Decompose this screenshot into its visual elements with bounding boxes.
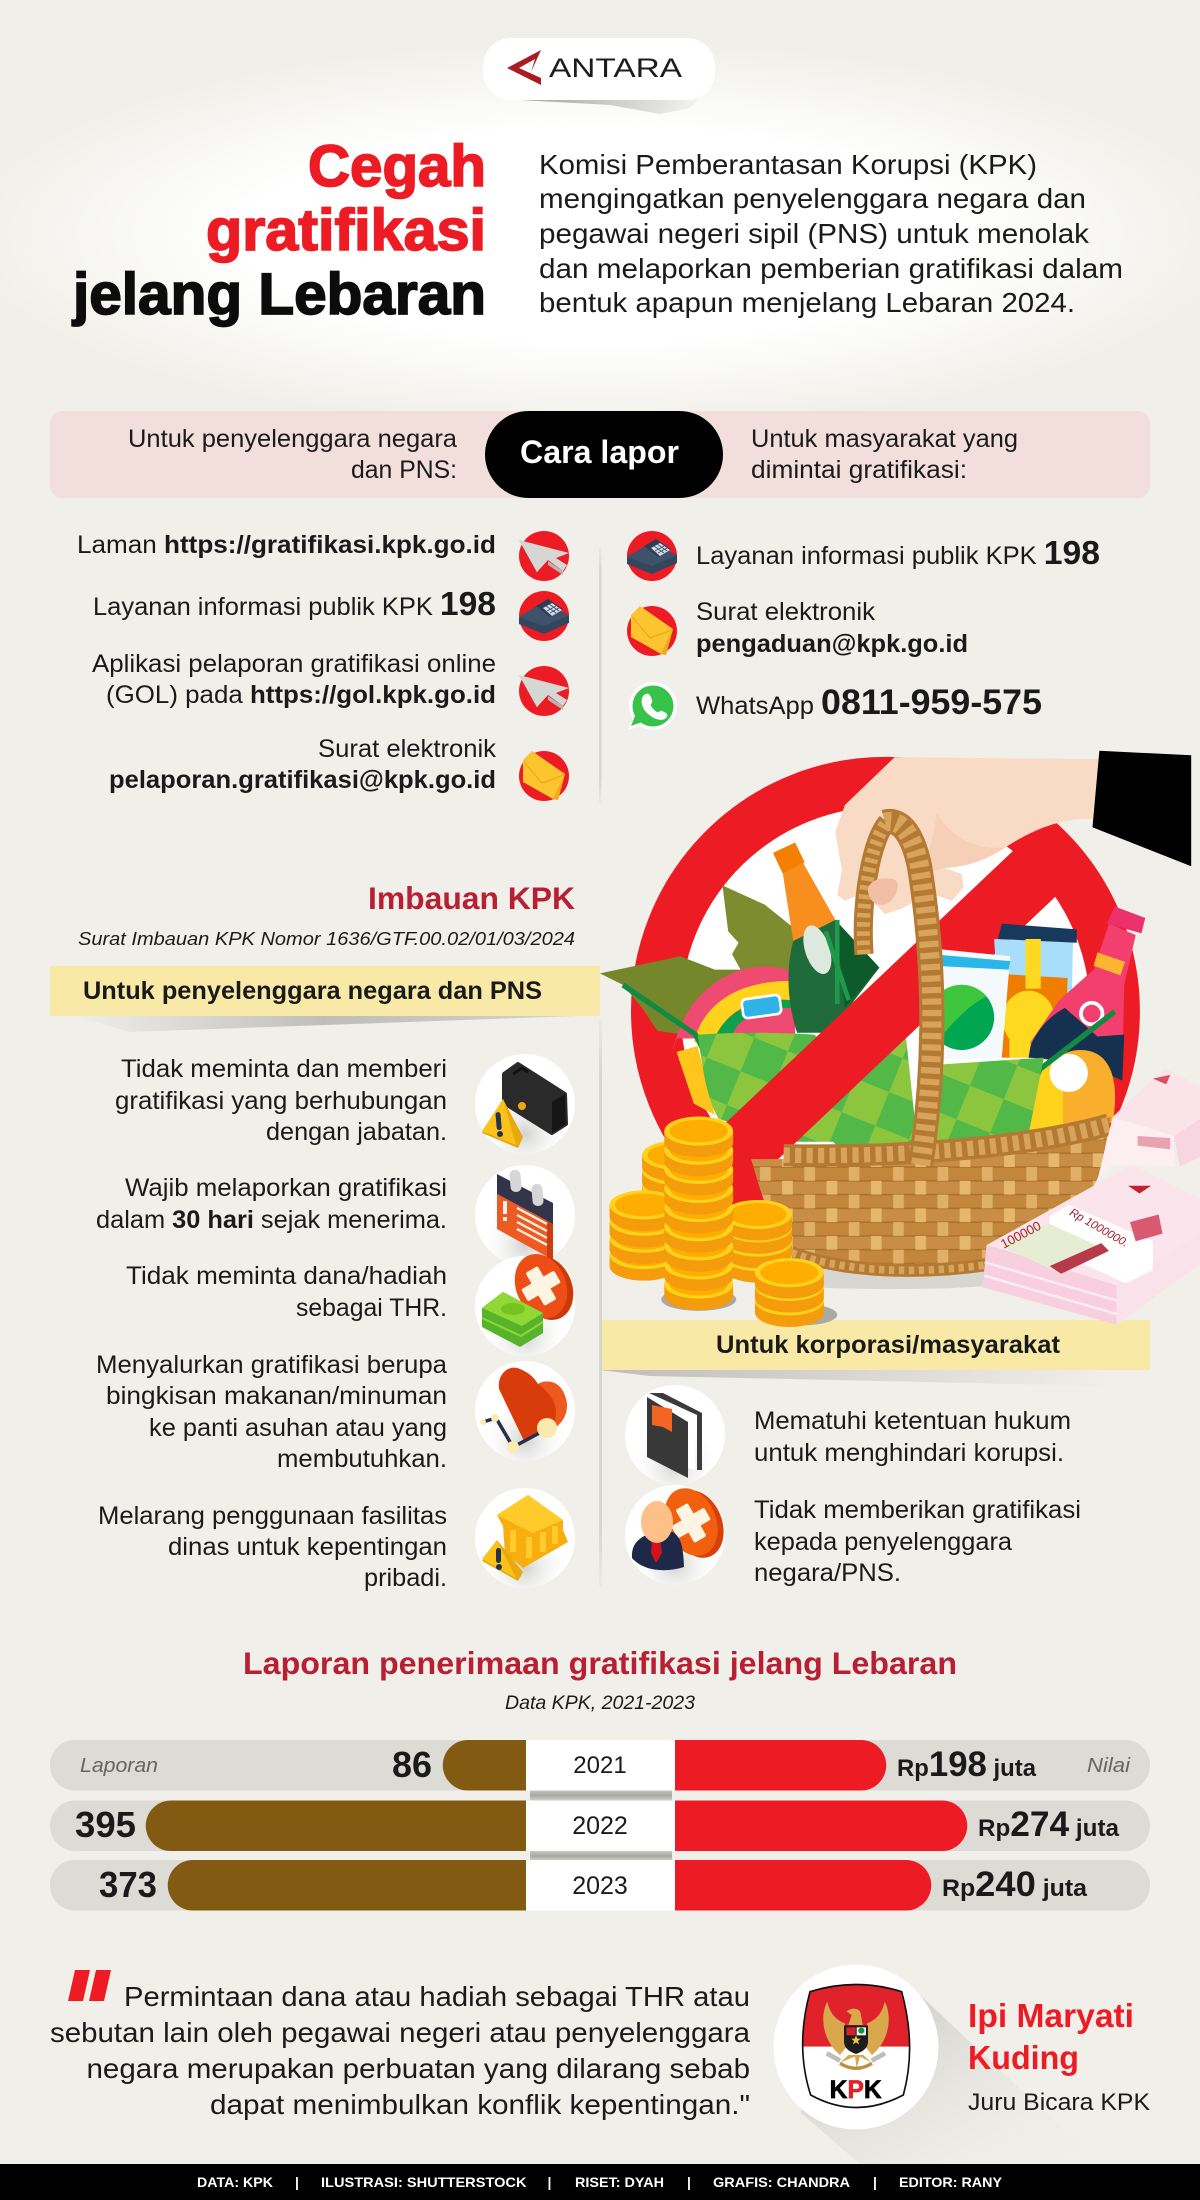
row: 2021: 2021 xyxy=(573,1752,627,1779)
KPK wordmark: KPK xyxy=(830,2077,882,2104)
footer credits: DATA: KPK xyxy=(197,2174,273,2190)
speaker: Kuding xyxy=(968,2040,1079,2077)
panel: advice for corporations and the public xyxy=(625,1385,1081,1587)
quote text: Permintaan dana atau hadiah sebagai THR atau xyxy=(124,1981,750,2012)
footer credits xyxy=(0,2164,1200,2200)
coins xyxy=(610,1117,837,1327)
heading: Imbauan KPK xyxy=(78,880,575,949)
item: tidak memberikan: Tidak memberikan gratifikasi xyxy=(754,1496,1081,1524)
footer credits: | xyxy=(687,2174,691,2190)
item: mematuhi hukum: Mematuhi ketentuan hukum xyxy=(754,1407,1071,1435)
footer credits: EDITOR: RANY xyxy=(899,2174,1003,2190)
channel: layanan informasi xyxy=(93,585,569,641)
panel: right reporting channels xyxy=(627,531,1100,730)
row: 2021 xyxy=(50,1740,1150,1790)
ketupat xyxy=(623,985,1115,1146)
item: wajib melapor xyxy=(96,1174,447,1234)
back bill stack xyxy=(1097,1068,1200,1180)
letter reference: Surat Imbauan KPK Nomor 1636/GTF.00.02/01/03/2024 xyxy=(78,928,575,949)
banner pill: Cara lapor xyxy=(520,434,679,470)
channel: whatsapp: WhatsApp 0811-959-575 xyxy=(696,683,1042,722)
logo: ANTARA xyxy=(483,38,715,114)
item: tidak memberikan xyxy=(754,1496,1081,1587)
divider xyxy=(599,1020,602,1586)
row: 2021: Laporan xyxy=(80,1755,158,1777)
heading: laporan penerimaan: Laporan penerimaan gratifikasi jelang Lebaran xyxy=(243,1645,957,1681)
item: fasilitas dinas: dinas untuk kepentingan xyxy=(168,1533,447,1561)
chart: diverging bars xyxy=(50,1740,1150,1910)
row: 2023: Rp240 juta xyxy=(942,1865,1088,1904)
logo mark xyxy=(507,50,541,85)
title: jelang Lebaran xyxy=(72,262,486,327)
item: dana THR: sebagai THR. xyxy=(296,1294,447,1322)
logo wordmark: ANTARA xyxy=(549,53,682,83)
icon: heart xyxy=(475,1361,575,1461)
footer credits: | xyxy=(295,2174,299,2190)
quotation mark xyxy=(68,1970,111,2001)
money stacks xyxy=(983,1068,1200,1325)
row: 2021: Nilai xyxy=(1087,1755,1131,1777)
item: bingkisan: Menyalurkan gratifikasi berupa xyxy=(96,1351,447,1379)
footer credits: RISET: DYAH xyxy=(575,2174,664,2190)
item: fasilitas dinas: pribadi. xyxy=(364,1564,447,1592)
basket xyxy=(730,1117,1111,1289)
champagne bottle xyxy=(773,843,879,1033)
basket handle xyxy=(863,822,932,1165)
footer credits: | xyxy=(548,2174,551,2190)
footer credits: ILUSTRASI: SHUTTERSTOCK xyxy=(321,2174,526,2190)
banner text left: Untuk penyelenggara negara xyxy=(128,425,457,453)
channel: laman xyxy=(77,531,569,581)
channel: aplikasi GOL: Aplikasi pelaporan gratifikasi online xyxy=(92,650,496,678)
front bill stack: 100000 xyxy=(998,1218,1043,1252)
channel: layanan informasi: Layanan informasi publik KPK 198 xyxy=(93,585,496,622)
icon: calendar xyxy=(475,1165,575,1265)
illustration: basket in prohibition sign xyxy=(600,751,1200,1327)
channel: surat elektronik xyxy=(109,735,569,801)
icon: official and cross xyxy=(625,1480,733,1585)
item: bingkisan xyxy=(96,1351,447,1473)
channel: surat elektronik xyxy=(627,598,968,658)
item: dana THR xyxy=(126,1262,447,1322)
channel: surat elektronik: Surat elektronik xyxy=(696,598,876,626)
icon: briefcase warning xyxy=(475,1054,575,1154)
garuda emblem xyxy=(823,2002,889,2068)
title xyxy=(72,134,486,327)
item: wajib melapor: dalam 30 hari sejak menerima. xyxy=(96,1206,447,1234)
heading: Imbauan KPK: Imbauan KPK xyxy=(368,880,575,916)
row: 2022: 2022 xyxy=(572,1812,628,1840)
logo: KPK badge xyxy=(774,1964,1006,2160)
shield xyxy=(804,1985,909,2047)
channel: laman: Laman https://gratifikasi.kpk.go.id xyxy=(77,531,496,559)
item: mematuhi hukum xyxy=(754,1407,1071,1467)
item: dana THR: Tidak meminta dana/hadiah xyxy=(126,1262,447,1290)
item: tidak memberikan: kepada penyelenggara xyxy=(754,1528,1012,1556)
speaker role: Juru Bicara KPK xyxy=(968,2089,1150,2116)
icon: law book xyxy=(625,1385,725,1485)
channel: layanan informasi xyxy=(627,531,1100,581)
panel: advice for officials xyxy=(96,1054,583,1592)
row: 2022: Rp274 juta xyxy=(978,1805,1120,1844)
intro paragraph: bentuk apapun menjelang Lebaran 2024. xyxy=(539,287,1075,318)
banner text left: dan PNS: xyxy=(351,456,457,484)
banner text left xyxy=(128,425,457,484)
channel: whatsapp xyxy=(628,682,1042,730)
footer credits: | xyxy=(873,2174,877,2190)
connectors xyxy=(530,1790,672,1861)
jar xyxy=(994,924,1077,1058)
heading: laporan penerimaan xyxy=(243,1645,957,1714)
data source: Data KPK, 2021-2023 xyxy=(505,1693,695,1714)
band: korporasi/masyarakat xyxy=(600,1320,1150,1386)
row: 2023: 373 xyxy=(99,1864,157,1905)
item: tidak meminta xyxy=(115,1055,447,1146)
footer credits: GRAFIS: CHANDRA xyxy=(713,2174,850,2190)
banner text right: Untuk masyarakat yang xyxy=(751,425,1018,453)
row: 2021: Rp198 juta xyxy=(897,1745,1037,1784)
hand xyxy=(835,757,1099,914)
rainbow packet xyxy=(673,967,795,1115)
channel: layanan informasi: Layanan informasi publik KPK 198 xyxy=(696,534,1100,571)
channel: aplikasi GOL: (GOL) pada https://gol.kpk.go.id xyxy=(106,681,496,709)
prohibition bar overlay xyxy=(726,942,918,1159)
item: bingkisan: bingkisan makanan/minuman xyxy=(106,1382,447,1410)
item: wajib melapor: Wajib melaporkan gratifikasi xyxy=(125,1174,447,1202)
intro paragraph: pegawai negeri sipil (PNS) untuk menolak xyxy=(539,218,1090,249)
row: 2022: 395 xyxy=(75,1804,136,1845)
item: tidak meminta: dengan jabatan. xyxy=(266,1118,447,1146)
item: tidak meminta: Tidak meminta dan memberi xyxy=(121,1055,447,1083)
item: bingkisan: ke panti asuhan atau yang xyxy=(149,1414,447,1442)
prohibition ring xyxy=(656,782,1115,1241)
panel: cara lapor banner xyxy=(50,411,1150,498)
row: 2021: 86 xyxy=(392,1744,432,1785)
thumb xyxy=(868,878,898,905)
row: 2023: 2023 xyxy=(572,1872,628,1900)
icon: government building xyxy=(475,1488,575,1588)
band: penyelenggara negara: Untuk penyelenggara negara dan PNS xyxy=(83,977,542,1005)
banner text right xyxy=(751,425,1018,484)
banner pill xyxy=(485,411,723,498)
sauce bottle xyxy=(1028,906,1145,1130)
quote text: sebutan lain oleh pegawai negeri atau penyelenggara xyxy=(50,2017,750,2048)
panel: left reporting channels xyxy=(77,531,569,801)
front bill stack xyxy=(983,1165,1200,1325)
intro paragraph: mengingatkan penyelenggara negara dan xyxy=(539,183,1086,214)
channel: surat elektronik: Surat elektronik xyxy=(318,735,497,763)
intro paragraph: dan melaporkan pemberian gratifikasi dalam xyxy=(539,253,1123,284)
channel: surat elektronik: pelaporan.gratifikasi@kpk.go.id xyxy=(109,766,496,794)
row: 2022 xyxy=(50,1800,1150,1851)
item: mematuhi hukum: untuk menghindari korupsi. xyxy=(754,1439,1064,1467)
quote xyxy=(50,1970,750,2120)
item: bingkisan: membutuhkan. xyxy=(277,1445,447,1473)
quote text: negara merupakan perbuatan yang dilarang sebab xyxy=(86,2053,750,2084)
speaker xyxy=(968,1998,1150,2116)
title: gratifikasi xyxy=(206,198,486,263)
channel: surat elektronik: pengaduan@kpk.go.id xyxy=(696,630,968,658)
band: penyelenggara negara xyxy=(50,966,600,1032)
speaker: Ipi Maryati xyxy=(968,1998,1134,2035)
can xyxy=(927,949,1010,1060)
intro paragraph: Komisi Pemberantasan Korupsi (KPK) xyxy=(539,149,1037,180)
item: fasilitas dinas xyxy=(98,1502,447,1592)
channel: aplikasi GOL xyxy=(92,650,569,716)
band: korporasi/masyarakat: Untuk korporasi/masyarakat xyxy=(716,1331,1061,1359)
quote text xyxy=(50,1981,750,2120)
sleeve xyxy=(1092,751,1191,866)
quote text: dapat menimbulkan konflik kepentingan." xyxy=(210,2089,750,2120)
icon: money and cross xyxy=(475,1246,583,1356)
title: Cegah xyxy=(308,134,486,199)
banner text right: dimintai gratifikasi: xyxy=(751,456,967,484)
front bill stack: Rp 1000000. xyxy=(1067,1207,1130,1250)
intro paragraph xyxy=(539,149,1123,318)
item: fasilitas dinas: Melarang penggunaan fasilitas xyxy=(98,1502,447,1530)
item: tidak meminta: gratifikasi yang berhubungan xyxy=(115,1087,447,1115)
leaves xyxy=(600,885,793,1035)
divider xyxy=(599,547,602,803)
row: 2023 xyxy=(50,1860,1150,1910)
item: tidak memberikan: negara/PNS. xyxy=(754,1559,901,1587)
